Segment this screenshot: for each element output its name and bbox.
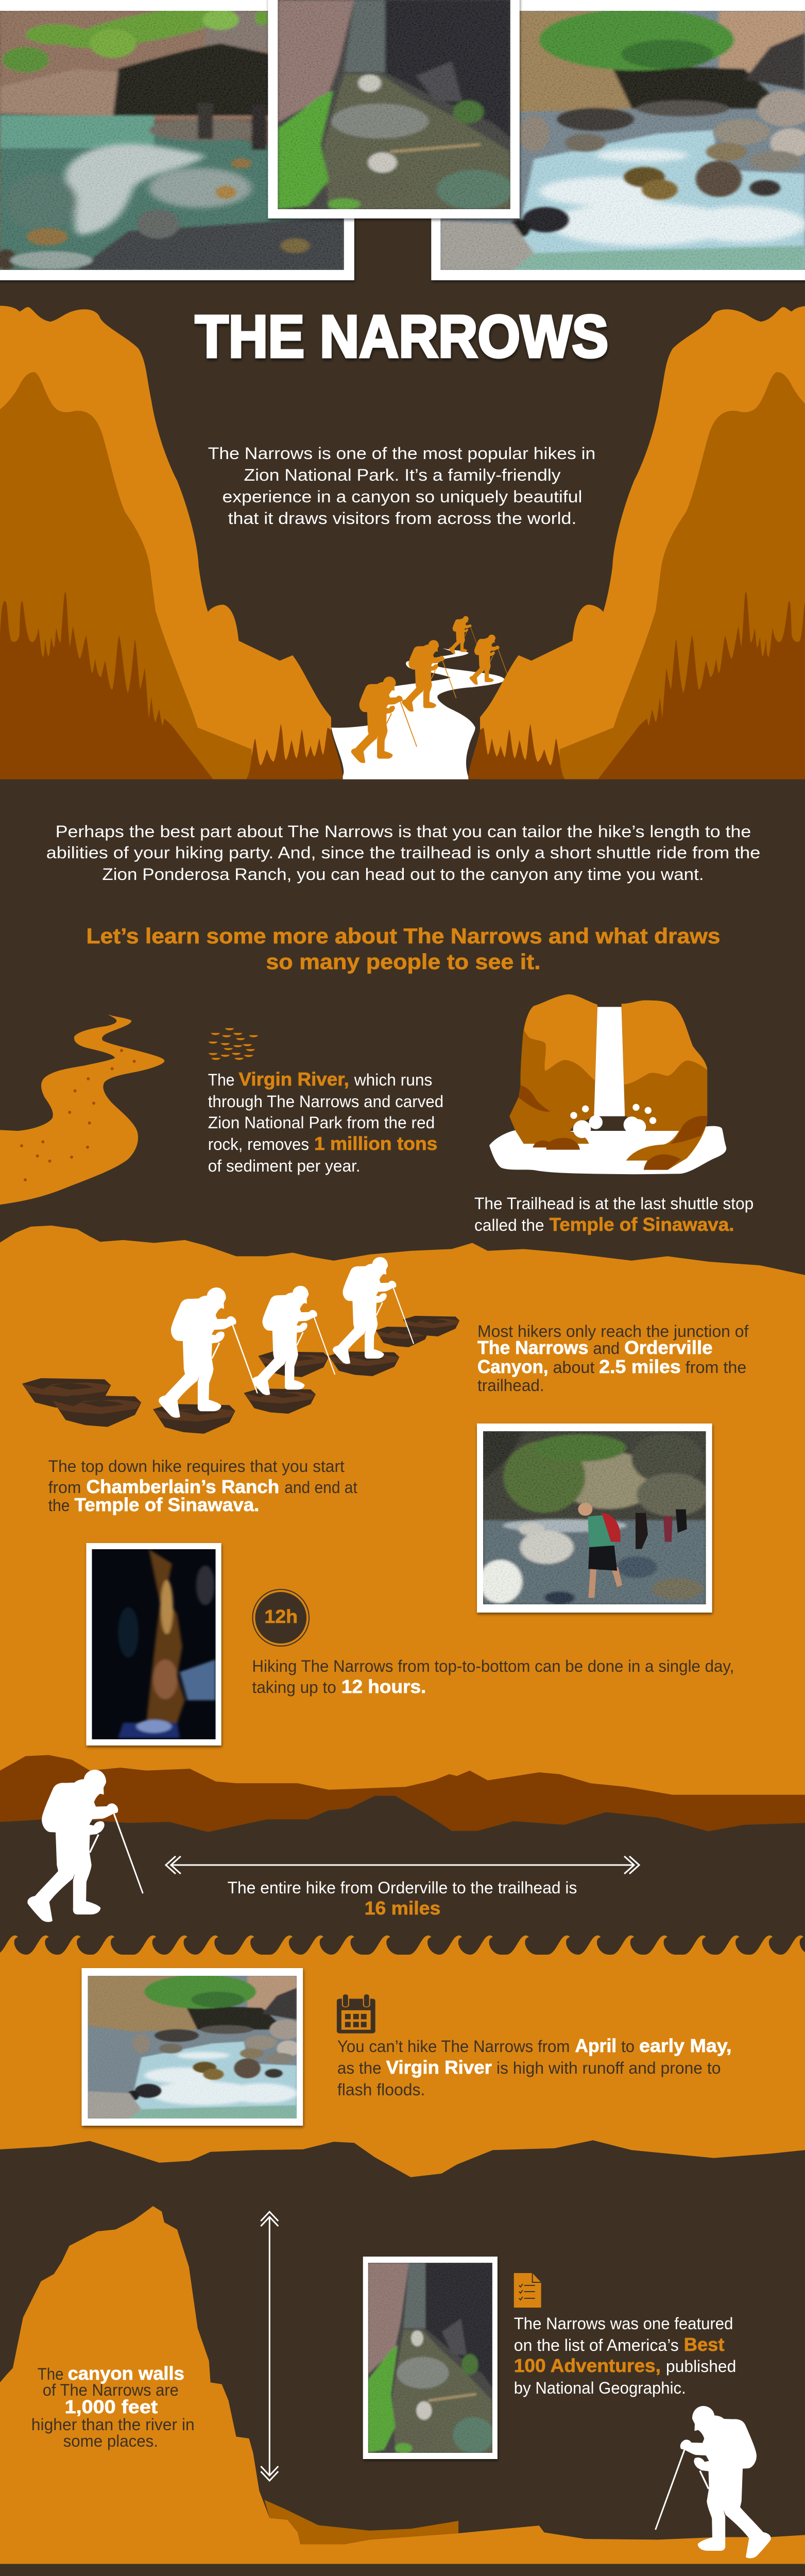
text: best 100 adventures: Best [684, 2334, 725, 2355]
paragraph: tailor the hike [46, 822, 760, 884]
text: canyon walls: The [38, 2365, 64, 2383]
text: trailhead [474, 1194, 753, 1235]
text: most hikers: Orderville [624, 1337, 713, 1358]
photo: portrait canyon [363, 2257, 498, 2459]
text: April to early May [337, 2035, 731, 2099]
icon: 12h badge [252, 1589, 309, 1646]
text: most hikers: 2.5 miles [599, 1356, 681, 1377]
title: THE NARROWS [195, 303, 608, 370]
photo: rapids [81, 1968, 303, 2126]
hiker: white, 16 miles [27, 1770, 144, 1922]
intro text: Zion National Park. It’s a family-friendly [244, 466, 561, 484]
photo: river with hikers, left [0, 0, 354, 280]
text: canyon walls [31, 2363, 195, 2450]
text: best 100 adventures: The Narrows was one featured [514, 2314, 733, 2333]
text: Virgin River sediment: of sediment per year. [208, 1157, 361, 1175]
paragraph: tailor the hike: abilities of your hiking party. And, since the trailhead is only a short shuttle ride from the [46, 843, 760, 862]
intro text [208, 444, 595, 528]
illustration: orange river with stones [0, 1014, 164, 1205]
text: April to early May: is high with runoff and prone to [496, 2059, 721, 2077]
text: top down hike: from [48, 1478, 81, 1497]
heading: learn more: Let’s learn some more about The Narrows and what draws [86, 924, 721, 948]
text: April to early May: early May, [639, 2035, 731, 2056]
illustration: stepping stones [22, 1316, 459, 1434]
text: Virgin River sediment: The [208, 1071, 235, 1089]
intro text: The Narrows is one of the most popular hikes in [208, 444, 595, 463]
panel: dark band with ridge [0, 2140, 805, 2576]
panel: dark ridge band [0, 1796, 805, 1959]
text: top down hike: and end at [284, 1478, 357, 1497]
text: best 100 adventures: published [666, 2357, 736, 2376]
text: most hikers: trailhead. [477, 1376, 544, 1395]
icon: calendar [337, 1994, 375, 2033]
paragraph: tailor the hike: Zion Ponderosa Ranch, you can head out to the canyon any time you want. [102, 865, 704, 884]
text: hiking top to bottom: Hiking The Narrows from top-to-bottom can be done in a single day, [252, 1657, 734, 1675]
text: trailhead: called the [474, 1216, 544, 1234]
text: hiking top to bottom [252, 1657, 734, 1697]
text: most hikers: Most hikers only reach the junction of [477, 1322, 748, 1341]
heading: learn more [86, 924, 721, 974]
text: canyon walls: some places. [63, 2432, 158, 2450]
text: April to early May: April [575, 2035, 616, 2056]
hiker: orange, front [351, 676, 417, 763]
paragraph: tailor the hike: Perhaps the best part about The Narrows is that you can tailor the hike’s length to the [56, 822, 751, 841]
hiker: white on stones, first [159, 1287, 258, 1418]
illustration: left canyon wall [0, 306, 343, 779]
text: canyon walls: canyon walls [68, 2363, 184, 2384]
illustration: rust ridge [0, 1755, 805, 1881]
illustration: white river winding through canyon [331, 648, 505, 779]
text: best 100 adventures [514, 2314, 736, 2397]
text: top down hike: Chamberlain’s Ranch [86, 1476, 279, 1497]
text: top down hike [48, 1457, 357, 1515]
text: best 100 adventures: on the list of America’s [514, 2336, 679, 2354]
text: best 100 adventures: by National Geographic. [514, 2379, 686, 2397]
text: Virgin River sediment: which runs [354, 1071, 432, 1089]
text: Virgin River sediment: Virgin River, [239, 1069, 349, 1090]
text: Virgin River sediment: rock, removes [208, 1135, 309, 1154]
intro text: experience in a canyon so uniquely beautiful [222, 487, 582, 506]
text: 16 miles [228, 1878, 577, 1919]
text: top down hike: The top down hike requires that you start [48, 1457, 345, 1476]
icon: fish shoal [209, 1028, 258, 1060]
hiker: orange, far [449, 616, 478, 654]
text: April to early May: flash floods. [337, 2080, 425, 2099]
text: April to early May: to [621, 2037, 635, 2056]
text: trailhead: Temple of Sinawava. [550, 1214, 734, 1235]
text: top down hike: Temple of Sinawava. [75, 1494, 259, 1515]
icon: checklist document [514, 2273, 541, 2308]
text: most hikers: and [593, 1339, 620, 1358]
photo: group hiking in river [477, 1423, 712, 1613]
hiker: orange, second [402, 640, 456, 711]
icon: 12h badge: 12h [264, 1606, 298, 1627]
text: Virgin River sediment: through The Narrows and carved [208, 1092, 443, 1111]
text: most hikers: about [553, 1358, 594, 1377]
text: trailhead: The Trailhead is at the last shuttle stop [474, 1194, 753, 1213]
text: Virgin River sediment: Zion National Park from the red [208, 1113, 435, 1132]
illustration: right canyon wall (mirror) [468, 306, 805, 779]
text: best 100 adventures: 100 Adventures, [514, 2355, 661, 2376]
text: 16 miles: 16 miles [365, 1897, 440, 1919]
text: April to early May: You can’t hike The Narrows from [337, 2037, 570, 2056]
text: top down hike: the [48, 1496, 70, 1515]
text: canyon walls: higher than the river in [31, 2415, 195, 2434]
text: canyon walls: 1,000 feet [65, 2396, 158, 2417]
text: hiking top to bottom: taking up to [252, 1678, 336, 1697]
arrow: 16 miles span [166, 1856, 639, 1874]
panel: orange wave band [0, 1936, 805, 2190]
arrow: 1,000 feet height [261, 2212, 278, 2481]
text: most hikers: Canyon, [477, 1356, 549, 1377]
hiker: white on stones, second [252, 1286, 335, 1395]
text: Virgin River sediment: 1 million tons [314, 1133, 437, 1154]
illustration: waterfall [489, 994, 726, 1174]
text: most hikers: from the [686, 1358, 746, 1377]
text: most hikers [477, 1322, 748, 1395]
illustration: canyon wall and ground [0, 2206, 805, 2564]
photo: canyon walls, centre [268, 0, 520, 218]
text: most hikers: The Narrows [477, 1337, 588, 1358]
hiker: orange, third [470, 635, 508, 685]
hiker: white on stones, third [333, 1257, 414, 1364]
text: 16 miles: The entire hike from Orderville to the trailhead is [228, 1878, 577, 1897]
panel: orange ridge band [0, 1226, 805, 1881]
hiker: white facing left [655, 2406, 771, 2558]
text: Virgin River sediment [208, 1069, 443, 1175]
text: April to early May: as the [337, 2059, 382, 2077]
photo: dark narrow slot [86, 1543, 221, 1745]
photo: river rapids, right [431, 0, 805, 280]
heading: learn more: so many people to see it. [266, 950, 541, 974]
text: hiking top to bottom: 12 hours. [341, 1676, 426, 1697]
text: canyon walls: of The Narrows are [43, 2381, 179, 2399]
text: April to early May: Virgin River [386, 2057, 492, 2078]
intro text: that it draws visitors from across the world. [228, 509, 576, 528]
